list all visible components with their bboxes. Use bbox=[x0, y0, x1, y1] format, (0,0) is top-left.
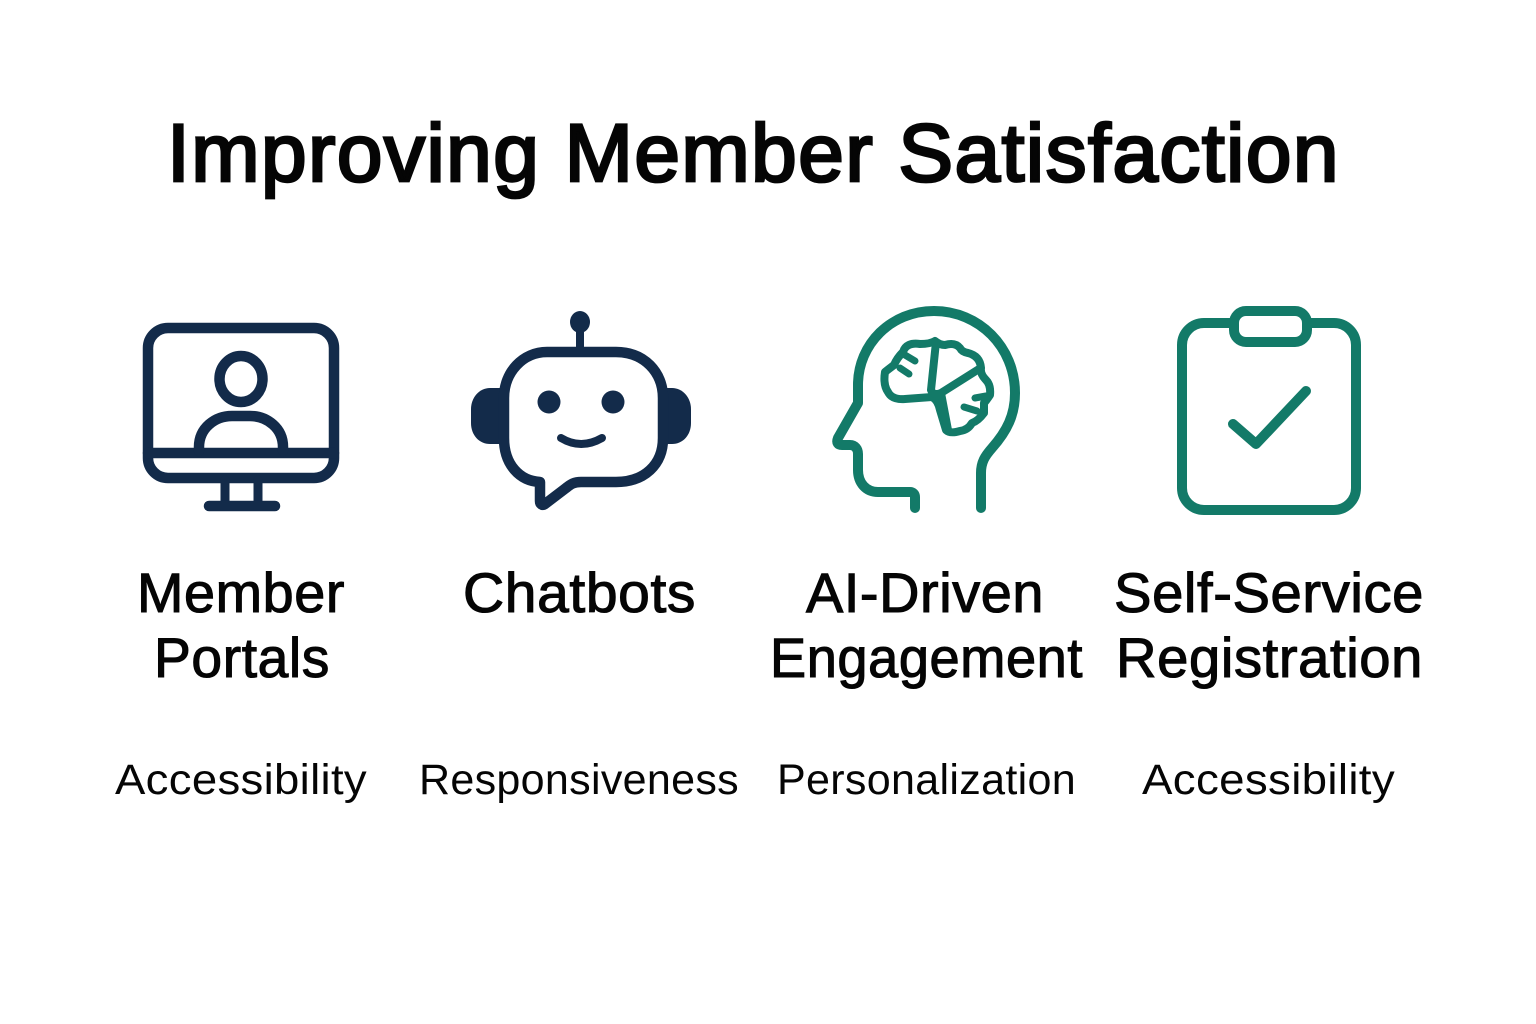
heading: self-service registration: Self-Service bbox=[1114, 561, 1424, 624]
panel: self-service registration bbox=[1114, 311, 1424, 804]
icon: clipboard with check bbox=[1182, 311, 1356, 510]
icon: monitor with user bbox=[148, 328, 334, 506]
panel: AI-driven engagement bbox=[770, 311, 1083, 804]
panel: member portals bbox=[115, 328, 367, 804]
label: accessibility: Accessibility bbox=[1142, 756, 1395, 804]
heading: AI-driven engagement: AI-Driven bbox=[806, 561, 1044, 624]
heading: member portals bbox=[137, 561, 345, 689]
icon: robot chat bubble bbox=[471, 311, 691, 505]
heading: member portals: Member bbox=[137, 561, 345, 624]
icon: head with brain bbox=[837, 311, 1015, 508]
heading: member portals: Portals bbox=[154, 626, 330, 689]
heading: self-service registration bbox=[1114, 561, 1424, 689]
heading: AI-driven engagement bbox=[770, 561, 1083, 689]
label: personalization: Personalization bbox=[777, 756, 1076, 804]
title: Improving Member Satisfaction bbox=[167, 108, 1340, 199]
heading: AI-driven engagement: Engagement bbox=[770, 626, 1083, 689]
heading: self-service registration: Registration bbox=[1116, 626, 1423, 689]
heading: chatbots: Chatbots bbox=[463, 561, 696, 624]
panel: chatbots bbox=[419, 311, 739, 804]
label: accessibility: Accessibility bbox=[115, 756, 367, 804]
label: responsiveness: Responsiveness bbox=[419, 756, 739, 804]
